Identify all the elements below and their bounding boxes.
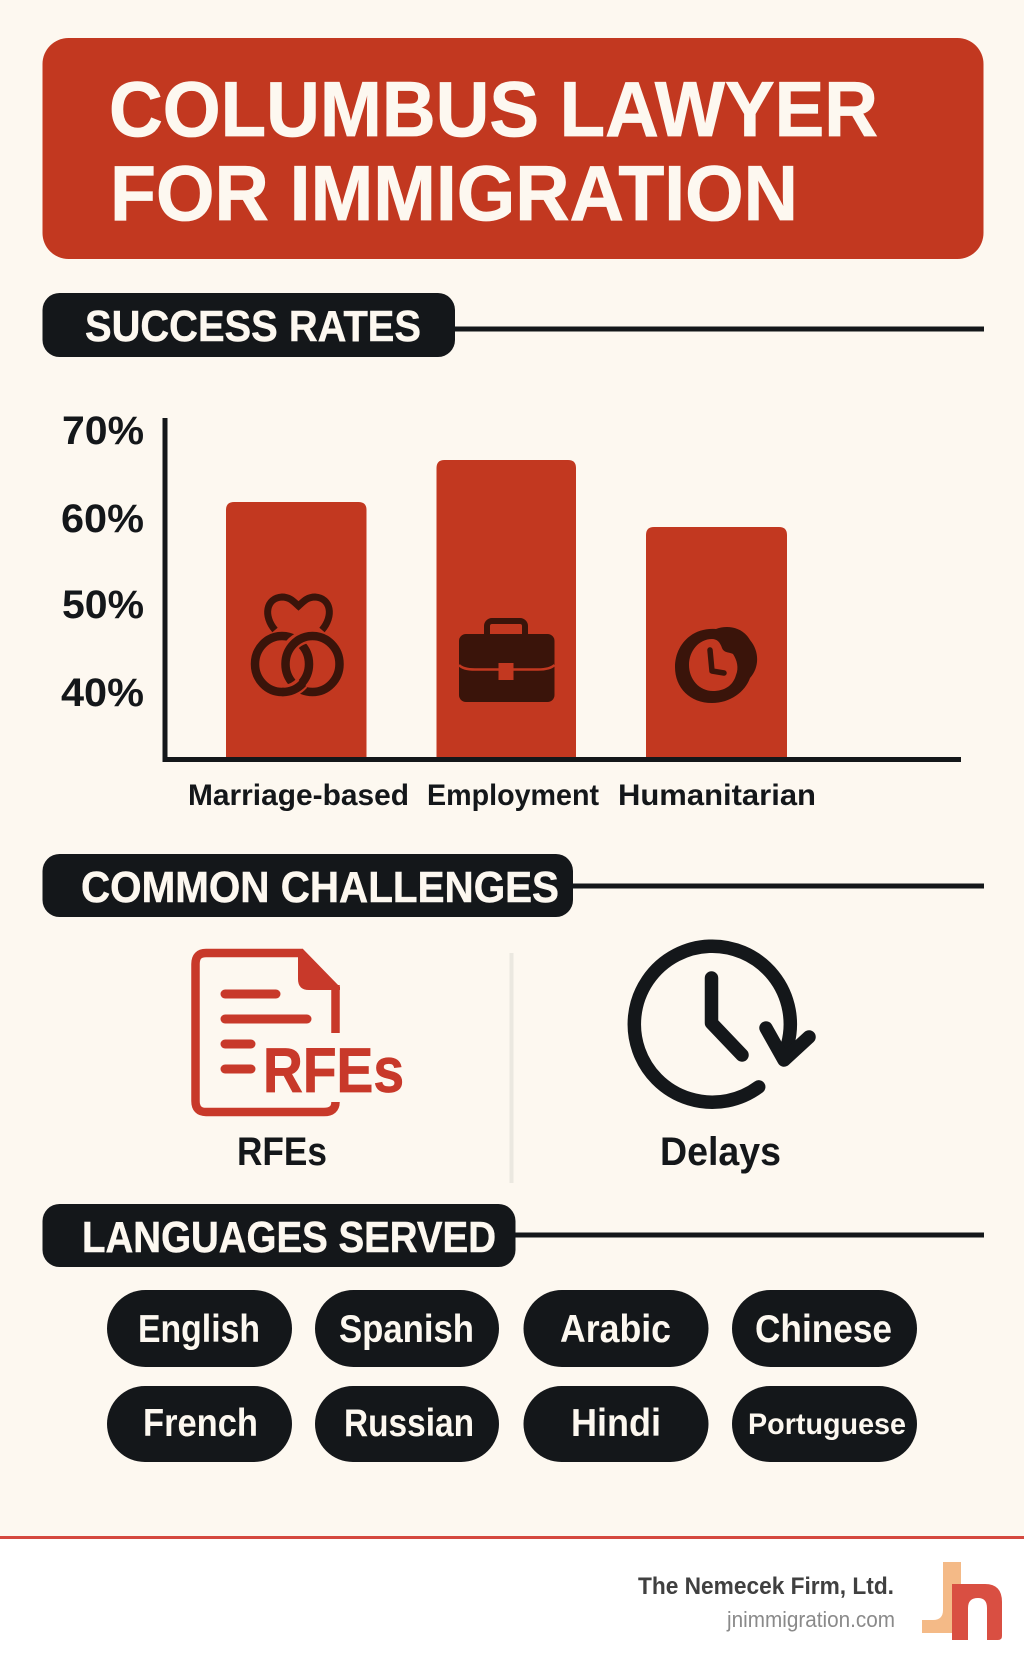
pill: Arabic (524, 1290, 708, 1367)
icon: wedding rings and heart (255, 597, 340, 692)
footer firm name: The Nemecek Firm, Ltd. (638, 1573, 894, 1600)
section heading: success rates: SUCCESS RATES (85, 302, 421, 351)
pill: Spanish: Spanish (339, 1308, 474, 1351)
logo: Jn (922, 1562, 1002, 1640)
bar labels: Marriage-based (188, 779, 409, 812)
footer url: jnimmigration.com (726, 1607, 895, 1632)
bar labels: Humanitarian (618, 779, 816, 812)
section heading: success rates (42, 293, 984, 357)
pill: Chinese (732, 1290, 917, 1367)
footer (0, 1536, 1024, 1666)
title banner (42, 38, 984, 259)
y axis labels: 70% (62, 409, 144, 453)
y axis labels (61, 409, 144, 715)
pill: Hindi (524, 1386, 708, 1462)
icon: clock with arrow (634, 946, 809, 1102)
bar: marriage-based (226, 502, 366, 759)
icon: RFE document (196, 949, 404, 1112)
pill: English (107, 1290, 292, 1367)
title text (109, 65, 878, 237)
label: delays: Delays (660, 1130, 781, 1174)
bar labels (188, 779, 816, 812)
pill: Chinese: Chinese (755, 1308, 892, 1351)
chart axes (165, 418, 961, 760)
pill: French (107, 1386, 292, 1462)
pill: Spanish (315, 1290, 499, 1367)
title text: FOR IMMIGRATION (110, 149, 798, 237)
y axis labels: 60% (61, 497, 144, 541)
pill: Russian (315, 1386, 499, 1462)
bar: humanitarian (646, 527, 787, 759)
icon: clock (675, 627, 757, 703)
pill: Russian: Russian (344, 1402, 474, 1445)
section heading: languages served (42, 1204, 984, 1267)
pill: English: English (138, 1308, 260, 1351)
pill: Arabic: Arabic (560, 1308, 671, 1351)
divider (510, 953, 514, 1183)
panel: delays challenge (634, 946, 809, 1174)
y axis labels: 40% (61, 671, 144, 715)
label: RFEs: RFEs (237, 1130, 327, 1174)
language pills (107, 1290, 917, 1462)
section heading: languages served: LANGUAGES SERVED (82, 1213, 496, 1262)
bar: employment (436, 460, 576, 759)
y axis labels: 50% (62, 583, 144, 627)
bar labels: Employment (427, 779, 599, 812)
title text: COLUMBUS LAWYER (109, 65, 878, 153)
bar chart: success rates (61, 409, 961, 812)
pill: French: French (143, 1402, 258, 1445)
pill: Portuguese: Portuguese (748, 1408, 906, 1441)
icon: briefcase (459, 621, 554, 702)
pill: Portuguese (732, 1386, 917, 1462)
section heading: common challenges: COMMON CHALLENGES (81, 863, 559, 912)
section heading: common challenges (42, 854, 984, 917)
icon: RFE document: RFEs (263, 1036, 404, 1106)
pill: Hindi: Hindi (571, 1402, 661, 1445)
panel: RFEs challenge (196, 949, 404, 1174)
